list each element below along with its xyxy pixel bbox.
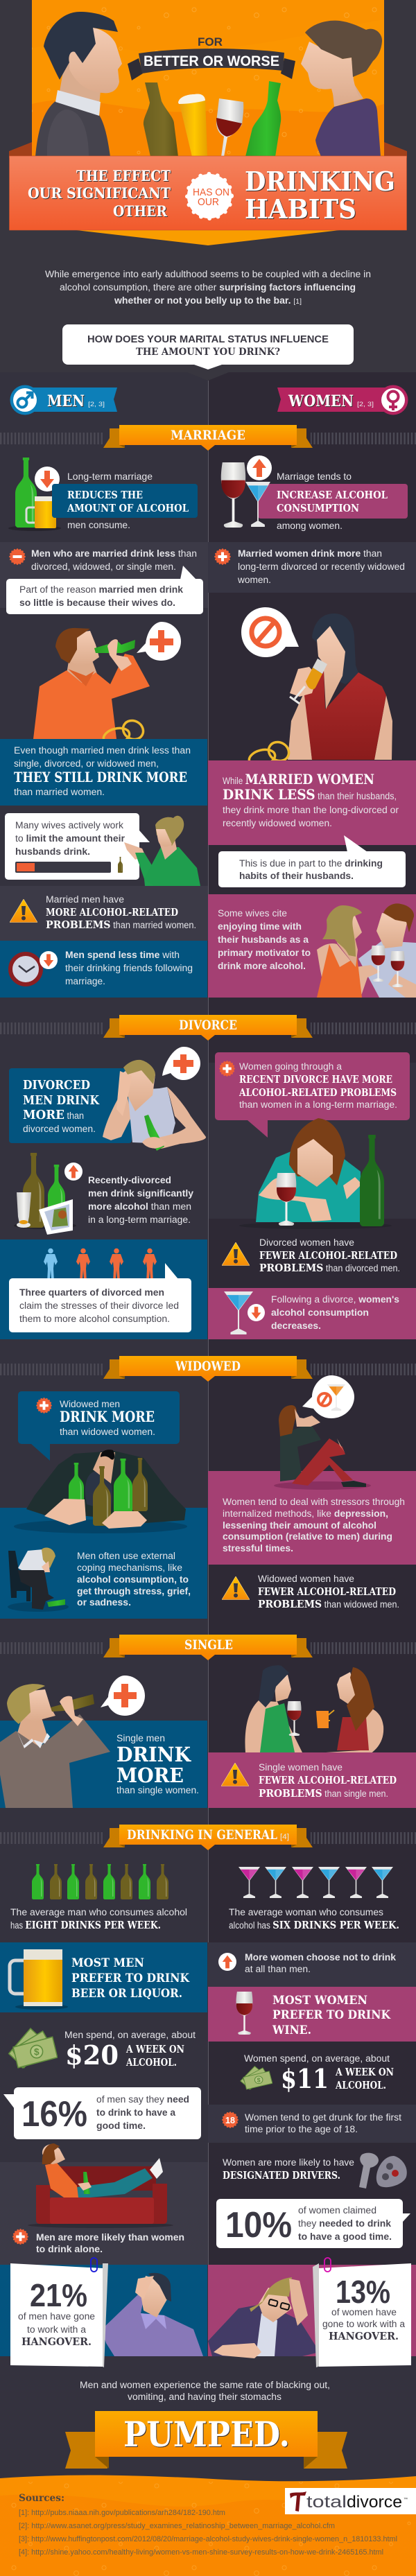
- bubble: widowed men drink more: than widowed women.: [60, 1427, 155, 1437]
- note: fewer problems divorced: PROBLEMS than divorced men.: [259, 1262, 400, 1274]
- icon: wedding rings: [248, 738, 292, 768]
- bubble: widowed men drink more: Widowed men: [60, 1399, 120, 1409]
- icon: bottle and beer mug: [8, 458, 61, 531]
- sources: [1]: http://pubs.niaaa.nih.gov/publications/arh284/182-190.htm: [19, 2509, 225, 2517]
- band: women choose not to drink: at all than men.: [245, 1964, 311, 1974]
- text: eight drinks per week: has EIGHT DRINKS PER WEEK.: [10, 1919, 161, 1931]
- label: men: [2, 3]: [88, 401, 105, 408]
- illustration: two women talking: [245, 1665, 383, 1761]
- title right lines: DRINKING: [245, 166, 395, 197]
- section ribbon: marriage: [0, 425, 416, 451]
- stat: women spend $11: Women spend, on average, about: [244, 2053, 390, 2064]
- icon row: eight bottles: [32, 1864, 168, 1899]
- text: recently divorced men: in a long-term marriage.: [88, 1215, 191, 1225]
- section ribbon: divorce: DIVORCE: [179, 1018, 237, 1033]
- label: men: MEN: [47, 392, 85, 410]
- band: men drink less: Men who are married drink less than: [31, 548, 197, 559]
- illustration: man drinking from bottle: [33, 622, 181, 747]
- panel: women prefer wine: WINE.: [272, 2024, 311, 2037]
- panel: women prefer wine: PREFER TO DRINK: [272, 2008, 391, 2022]
- text: six drinks per week: [229, 1907, 399, 1931]
- panel: they still drink more: THEY STILL DRINK MORE: [14, 769, 187, 785]
- panel: single men: [0, 1676, 207, 1808]
- note: 21 percent: [10, 2258, 108, 2367]
- sources: [2]: http://www.asanet.org/press/study_examines_relatinoship_between_marriage_alcohol.cfm: [19, 2522, 335, 2530]
- heading: FOR: FOR: [198, 35, 223, 49]
- text: external coping: [77, 1551, 191, 1608]
- callout: 16 percent: to drink to have a: [96, 2107, 175, 2118]
- title left lines: THE EFFECT: [76, 167, 171, 184]
- text: eight drinks per week: [10, 1907, 187, 1931]
- label: women: [2, 3]: [357, 401, 374, 408]
- illustration: wine glass: [216, 98, 243, 157]
- section ribbon: drinking in general: [0, 1825, 416, 1850]
- panel: women marriage: [221, 455, 408, 531]
- band: more alcohol-related problems: Married men have: [46, 894, 124, 905]
- question callout: [62, 324, 354, 369]
- stat: women spend $11: ALCOHOL.: [335, 2079, 386, 2091]
- panel: women deal with stressors: [208, 1471, 416, 1565]
- bubble: recent divorce women: [215, 1052, 410, 1138]
- callout: wives limit drinking: husbands drink.: [15, 846, 90, 857]
- panel: married women drink less: recently widowed women.: [223, 818, 332, 828]
- band: women drink more: long-term divorced or recently widowed: [238, 562, 405, 572]
- illustration: woman at table with wine: [239, 1118, 392, 1229]
- panel: following a divorce: decreases.: [271, 1321, 321, 1331]
- badge: has on our: HAS ON: [193, 186, 229, 198]
- band: first drunk before 18: time prior to the age of 18.: [245, 2124, 358, 2134]
- panel: women marriage: among women.: [277, 520, 343, 531]
- stat: women spend $11: A WEEK ON: [335, 2066, 394, 2078]
- text: eight drinks per week: The average man who consumes alcohol: [10, 1907, 187, 1917]
- note: 21 percent: of men have gone: [18, 2311, 95, 2322]
- closing text: [80, 2380, 330, 2402]
- callout: part of the reason: Part of the reason married men drink: [19, 584, 183, 595]
- panel: fewer problems single: [208, 1752, 416, 1808]
- text: recently divorced men: men drink significantly: [88, 1188, 194, 1199]
- panel: men long-term marriage: men consume.: [67, 519, 130, 530]
- panel: married women drink less: While MARRIED WOMEN: [223, 771, 374, 787]
- panel: following a divorce: Following a divorce, women's: [271, 1294, 399, 1305]
- title left lines: OUR SIGNIFICANT: [28, 184, 171, 202]
- band: women drink more: women.: [237, 575, 271, 585]
- title right lines: HABITS: [245, 193, 356, 225]
- icon: beer mug: [10, 1949, 68, 2010]
- callout: habits of husbands: [218, 835, 406, 887]
- callout: 10 percent: they needed to drink: [298, 2218, 392, 2229]
- illustration: divorced man with bottle: [103, 1047, 206, 1151]
- illustration: woman pointing: [124, 816, 200, 886]
- band: first drunk before 18: 18: [225, 2115, 235, 2125]
- band: more alcohol-related problems: [0, 886, 208, 941]
- section ribbon: single: SINGLE: [184, 1637, 233, 1653]
- question callout: THE AMOUNT YOU DRINK?: [136, 347, 280, 358]
- section ribbon: drinking in general: [4]: [280, 1833, 289, 1841]
- illustration: single man drinking: [0, 1676, 145, 1808]
- note: 13 percent: 13%: [336, 2274, 390, 2310]
- illustration: woman with hangover: [208, 2277, 320, 2358]
- panel: divorced men drink more: divorced women.: [23, 1124, 96, 1134]
- callout: 16 percent: of men say they need: [96, 2094, 189, 2105]
- logo: total divorce: divorce: [347, 2493, 402, 2512]
- illustration: man in profile: [35, 12, 122, 157]
- bubble: no cocktail: [302, 1375, 354, 1418]
- header illustration panel: [9, 0, 407, 158]
- section ribbon: widowed: [0, 1356, 416, 1382]
- illustration: beer glass: [178, 94, 207, 157]
- section ribbon: drinking in general: DRINKING IN GENERAL: [127, 1827, 277, 1843]
- text: six drinks per week: alcohol has SIX DRINKS PER WEEK.: [229, 1919, 399, 1931]
- bubble: widowed men drink more: [18, 1391, 180, 1461]
- note: 21 percent: to work with a: [27, 2324, 87, 2335]
- callout: 10 percent: of women claimed: [298, 2205, 376, 2216]
- panel: some wives cite: [208, 894, 416, 998]
- note: fewer problems widowed: Widowed women have: [258, 1574, 354, 1584]
- title left lines: [28, 167, 171, 220]
- stat: men spend $20: $20: [65, 2039, 119, 2071]
- callout: 10 percent: [216, 2199, 410, 2248]
- callout: habits of husbands: This is due in part to the drinking: [239, 858, 383, 869]
- text: external coping: get through stress, grief,: [77, 1586, 191, 1596]
- ribbon: pumped: PUMPED.: [123, 2414, 290, 2455]
- section ribbon: marriage: MARRIAGE: [171, 428, 245, 443]
- sources: [4]: http://shine.yahoo.com/healthy-living/women-vs-men-shine-survey-results-on-how-we-drink-2465165.html: [19, 2548, 383, 2557]
- panel: they still drink more: single, divorced, or widowed men,: [14, 758, 159, 769]
- closing text: vomiting, and having their stomachs: [128, 2392, 281, 2402]
- label: women: [277, 385, 408, 415]
- callout: habits of husbands: habits of their husbands.: [239, 871, 354, 881]
- panel: some wives cite: Some wives cite: [218, 908, 287, 919]
- illustration: green bottle: [245, 81, 281, 157]
- panel: men long-term marriage: AMOUNT OF ALCOHOL: [67, 502, 189, 514]
- panel: some wives cite: primary motivator to: [218, 948, 311, 958]
- panel shade: divorce right column: [209, 1063, 416, 1219]
- bubble: recent divorce women: than women in a long-term marriage.: [239, 1099, 397, 1110]
- panel: married women drink less: DRINK LESS than their husbands,: [223, 786, 397, 803]
- note: designated drivers: DESIGNATED DRIVERS.: [223, 2169, 340, 2182]
- logo: total divorce: ™: [404, 2497, 408, 2502]
- logo: total divorce: total: [306, 2493, 347, 2512]
- section ribbon: divorce: [0, 1015, 416, 1041]
- illustration: man with hangover: [102, 2273, 203, 2356]
- panel: women marriage: CONSUMPTION: [277, 502, 359, 514]
- logo: total divorce: [285, 2488, 416, 2514]
- panel: women prefer wine: [208, 1987, 416, 2042]
- panel: they still drink more: [0, 739, 207, 806]
- callout: 10 percent: to have a good time.: [298, 2231, 392, 2242]
- panel: women marriage: INCREASE ALCOHOL: [277, 489, 388, 501]
- bubble: no drinking sign: [241, 607, 299, 657]
- intro text: whether or not you belly up to the bar. [1]: [114, 295, 302, 306]
- text: external coping: coping mechanisms, like: [77, 1563, 182, 1573]
- sources: [3]: http://www.huffingtonpost.com/2012/08/20/marriage-alcohol-study-wives-drink-single-women_n_1810133.html: [19, 2535, 397, 2543]
- ribbon: better or worse: BETTER OR WORSE: [144, 53, 279, 69]
- icon: small bottle: [118, 857, 123, 873]
- intro text: While emergence into early adulthood seems to be coupled with a decline in: [45, 269, 371, 279]
- callout: wives limit drinking: to limit the amount their: [15, 833, 125, 844]
- panel: they still drink more: Even though married men drink less than: [14, 745, 191, 756]
- question callout: HOW DOES YOUR MARITAL STATUS INFLUENCE: [87, 334, 329, 345]
- callout: part of the reason: so little is because their wives do.: [19, 598, 175, 608]
- panel: men prefer beer: PREFER TO DRINK: [71, 1972, 190, 1985]
- panel: following a divorce: [208, 1288, 416, 1339]
- callout: 16 percent: 16%: [21, 2094, 87, 2134]
- panel: single men: MORE: [116, 1764, 184, 1787]
- illustration: man slumped over bottles: [14, 1450, 187, 1533]
- panel: fewer problems single: PROBLEMS than single men.: [259, 1787, 388, 1800]
- illustration: woman in profile: [301, 21, 382, 157]
- stat: men spend $20: ALCOHOL.: [125, 2056, 177, 2069]
- badge: has on our: [187, 174, 232, 218]
- text: recently divorced men: [88, 1175, 194, 1225]
- panel: three quarters of divorced men: them to more alcohol consumption.: [19, 1314, 170, 1324]
- sources: [19, 2493, 397, 2557]
- sources: Sources:: [19, 2493, 64, 2504]
- panel: divorced men drink more: MEN DRINK: [23, 1093, 100, 1108]
- band: first drunk before 18: [208, 2105, 416, 2143]
- note: 21 percent: 21%: [30, 2277, 87, 2313]
- text: external coping: or sadness.: [77, 1597, 131, 1608]
- panel: women prefer wine: MOST WOMEN: [272, 1994, 367, 2008]
- stat: women spend $11: $11: [281, 2063, 329, 2094]
- band: more alcohol-related problems: PROBLEMS than married women.: [46, 919, 196, 931]
- panel: single men: than single women.: [116, 1785, 199, 1795]
- note: 13 percent: HANGOVER.: [329, 2330, 399, 2342]
- label: men: [10, 385, 117, 415]
- note: fewer problems widowed: PROBLEMS than widowed men.: [258, 1598, 399, 1610]
- panel: women deal with stressors: lessening their amount of alcohol: [223, 1520, 376, 1531]
- text: external coping: alcohol consumption, to: [77, 1574, 189, 1585]
- panel: women deal with stressors: internalized methods, like depression,: [223, 1508, 388, 1519]
- note: designated drivers: [223, 2153, 407, 2188]
- panel: women hangover: [208, 2258, 416, 2367]
- band: women choose not to drink: More women choose not to drink: [245, 1952, 397, 1963]
- icon: paper clip: [324, 2258, 331, 2272]
- stat: men spend $20: Men spend, on average, about: [64, 2030, 196, 2040]
- band: men drink alone: to drink alone.: [36, 2244, 103, 2254]
- panel: women deal with stressors: Women tend to deal with stressors through: [223, 1497, 405, 1507]
- panel: some wives cite: their husbands as a: [218, 934, 309, 945]
- panel: women deal with stressors: stressful times.: [223, 1543, 293, 1554]
- stat: men spend $20: [9, 2028, 196, 2071]
- band: women drink more: [208, 542, 416, 593]
- ribbon: better or worse: [128, 49, 295, 80]
- intro text: [45, 269, 371, 306]
- closing text: Men and women experience the same rate of blacking out,: [80, 2380, 330, 2390]
- panel: following a divorce: alcohol consumption: [271, 1307, 369, 1318]
- illustration: woman with glass: [288, 613, 392, 760]
- panel: men long-term marriage: REDUCES THE: [67, 489, 143, 501]
- panel: men spend less time: Men spend less time with: [65, 950, 180, 960]
- label: women: WOMEN: [288, 392, 354, 410]
- panel: men spend less time: their drinking friends following: [65, 963, 193, 973]
- text: recently divorced men: Recently-divorced: [88, 1175, 171, 1185]
- illustration: woman sitting: [274, 1375, 371, 1490]
- badge: has on our: OUR: [198, 196, 219, 208]
- intro text: alcohol consumption, there are other surprising factors influencing: [60, 282, 356, 293]
- note: fewer problems divorced: Divorced women have: [259, 1237, 354, 1248]
- illustration: man on chair with head in hands: [8, 1547, 69, 1612]
- panel: men spend less time: [0, 941, 207, 998]
- note: 13 percent: [313, 2258, 411, 2367]
- callout: 16 percent: [3, 2087, 201, 2139]
- title banner: [10, 156, 406, 245]
- panel: men long-term marriage: Long-term marriage: [67, 471, 153, 482]
- title left lines: OTHER: [113, 202, 167, 220]
- panel: three quarters of divorced men: [0, 1239, 207, 1339]
- text: six drinks per week: The average woman who consumes: [229, 1907, 383, 1917]
- icon: clock: [10, 954, 41, 984]
- panel: men prefer beer: MOST MEN: [71, 1956, 144, 1970]
- icon: female symbol: [388, 391, 398, 410]
- panel: they still drink more: than married women.: [14, 787, 105, 797]
- band: first drunk before 18: Women tend to get drunk for the first: [245, 2112, 401, 2123]
- stat: women spend $11: [241, 2053, 394, 2094]
- panel: men spend less time: marriage.: [65, 976, 105, 986]
- section ribbon: widowed: WIDOWED: [175, 1359, 241, 1374]
- panel: divorced men drink more: [9, 1047, 206, 1151]
- panel: divorced men drink more: MORE than: [23, 1108, 84, 1122]
- callout: wives limit drinking: [5, 813, 150, 880]
- icon row: people: [44, 1248, 157, 1282]
- band: men drink alone: Men are more likely than women: [36, 2232, 184, 2243]
- callout: 16 percent: good time.: [96, 2121, 146, 2131]
- note: fewer problems divorced: [222, 1237, 400, 1274]
- title right lines: [245, 166, 395, 225]
- callout: 10 percent: 10%: [225, 2205, 292, 2245]
- panel: fewer problems single: Single women have: [259, 1762, 343, 1773]
- band: women drink more: Married women drink more than: [238, 548, 382, 559]
- note: designated drivers: Women are more likely to have: [223, 2157, 354, 2168]
- icon: male symbol: [18, 392, 32, 408]
- text: external coping: Men often use external: [77, 1551, 175, 1561]
- panel: single men: Single men: [116, 1733, 165, 1743]
- icon: car keys: [359, 2153, 407, 2188]
- panel: three quarters of divorced men: Three quarters of divorced men: [19, 1287, 164, 1298]
- callout: part of the reason: [6, 566, 203, 614]
- panel: women marriage: Marriage tends to: [277, 471, 352, 482]
- icon row: six martinis: [239, 1867, 393, 1898]
- band: men drink less: divorced, widowed, or single men.: [31, 562, 176, 572]
- panel: divorced men drink more: DIVORCED: [23, 1078, 90, 1093]
- bubble: recent divorce women: Women going through a: [239, 1061, 342, 1072]
- band: more alcohol-related problems: MORE ALCOHOL-RELATED: [46, 906, 178, 919]
- bubble: widowed men drink more: DRINK MORE: [60, 1408, 155, 1425]
- icon: wine glass and martini: [221, 455, 272, 528]
- progress bar: [15, 862, 111, 873]
- panel: women deal with stressors: consumption (relative to men) during: [223, 1531, 392, 1542]
- panel: three quarters of divorced men: claim the stresses of their divorce led: [19, 1300, 179, 1311]
- stat: men spend $20: A WEEK ON: [125, 2043, 184, 2055]
- section ribbon: single: [0, 1635, 416, 1660]
- panel: married women drink less: [208, 760, 416, 845]
- text: recently divorced men: more alcohol than men: [88, 1201, 191, 1212]
- note: 13 percent: of women have: [331, 2307, 397, 2317]
- panel: men prefer beer: BEER OR LIQUOR.: [71, 1987, 182, 2001]
- icon: bottles and torn photo: [14, 1153, 83, 1235]
- illustration: man on sofa: [28, 2143, 173, 2228]
- icon: paper clip: [91, 2258, 97, 2272]
- illustration: couple toasting: [317, 903, 416, 998]
- panel: men hangover: [0, 2258, 207, 2367]
- band: men drink less: [0, 542, 208, 608]
- panel: single men: DRINK: [116, 1743, 192, 1766]
- note: 21 percent: HANGOVER.: [21, 2335, 92, 2348]
- note: fewer problems widowed: [222, 1574, 399, 1610]
- panel: men long-term marriage: [8, 458, 198, 531]
- band: women choose not to drink: [208, 1942, 416, 1987]
- ribbon: pumped: [65, 2411, 347, 2469]
- footer: [0, 2475, 416, 2576]
- panel: some wives cite: drink more alcohol.: [218, 961, 306, 971]
- note: 13 percent: gone to work with a: [322, 2319, 406, 2329]
- illustration: olive beer bottle: [144, 82, 178, 157]
- panel: married women drink less: they drink more than the long-divorced or: [223, 805, 399, 815]
- panel: widowed men band: [0, 1450, 207, 1619]
- band: men drink alone: [0, 2143, 208, 2265]
- callout: wives limit drinking: Many wives actively work: [15, 820, 123, 830]
- panel: some wives cite: enjoying time with: [218, 921, 302, 932]
- panel: men prefer beer: [0, 1942, 207, 2012]
